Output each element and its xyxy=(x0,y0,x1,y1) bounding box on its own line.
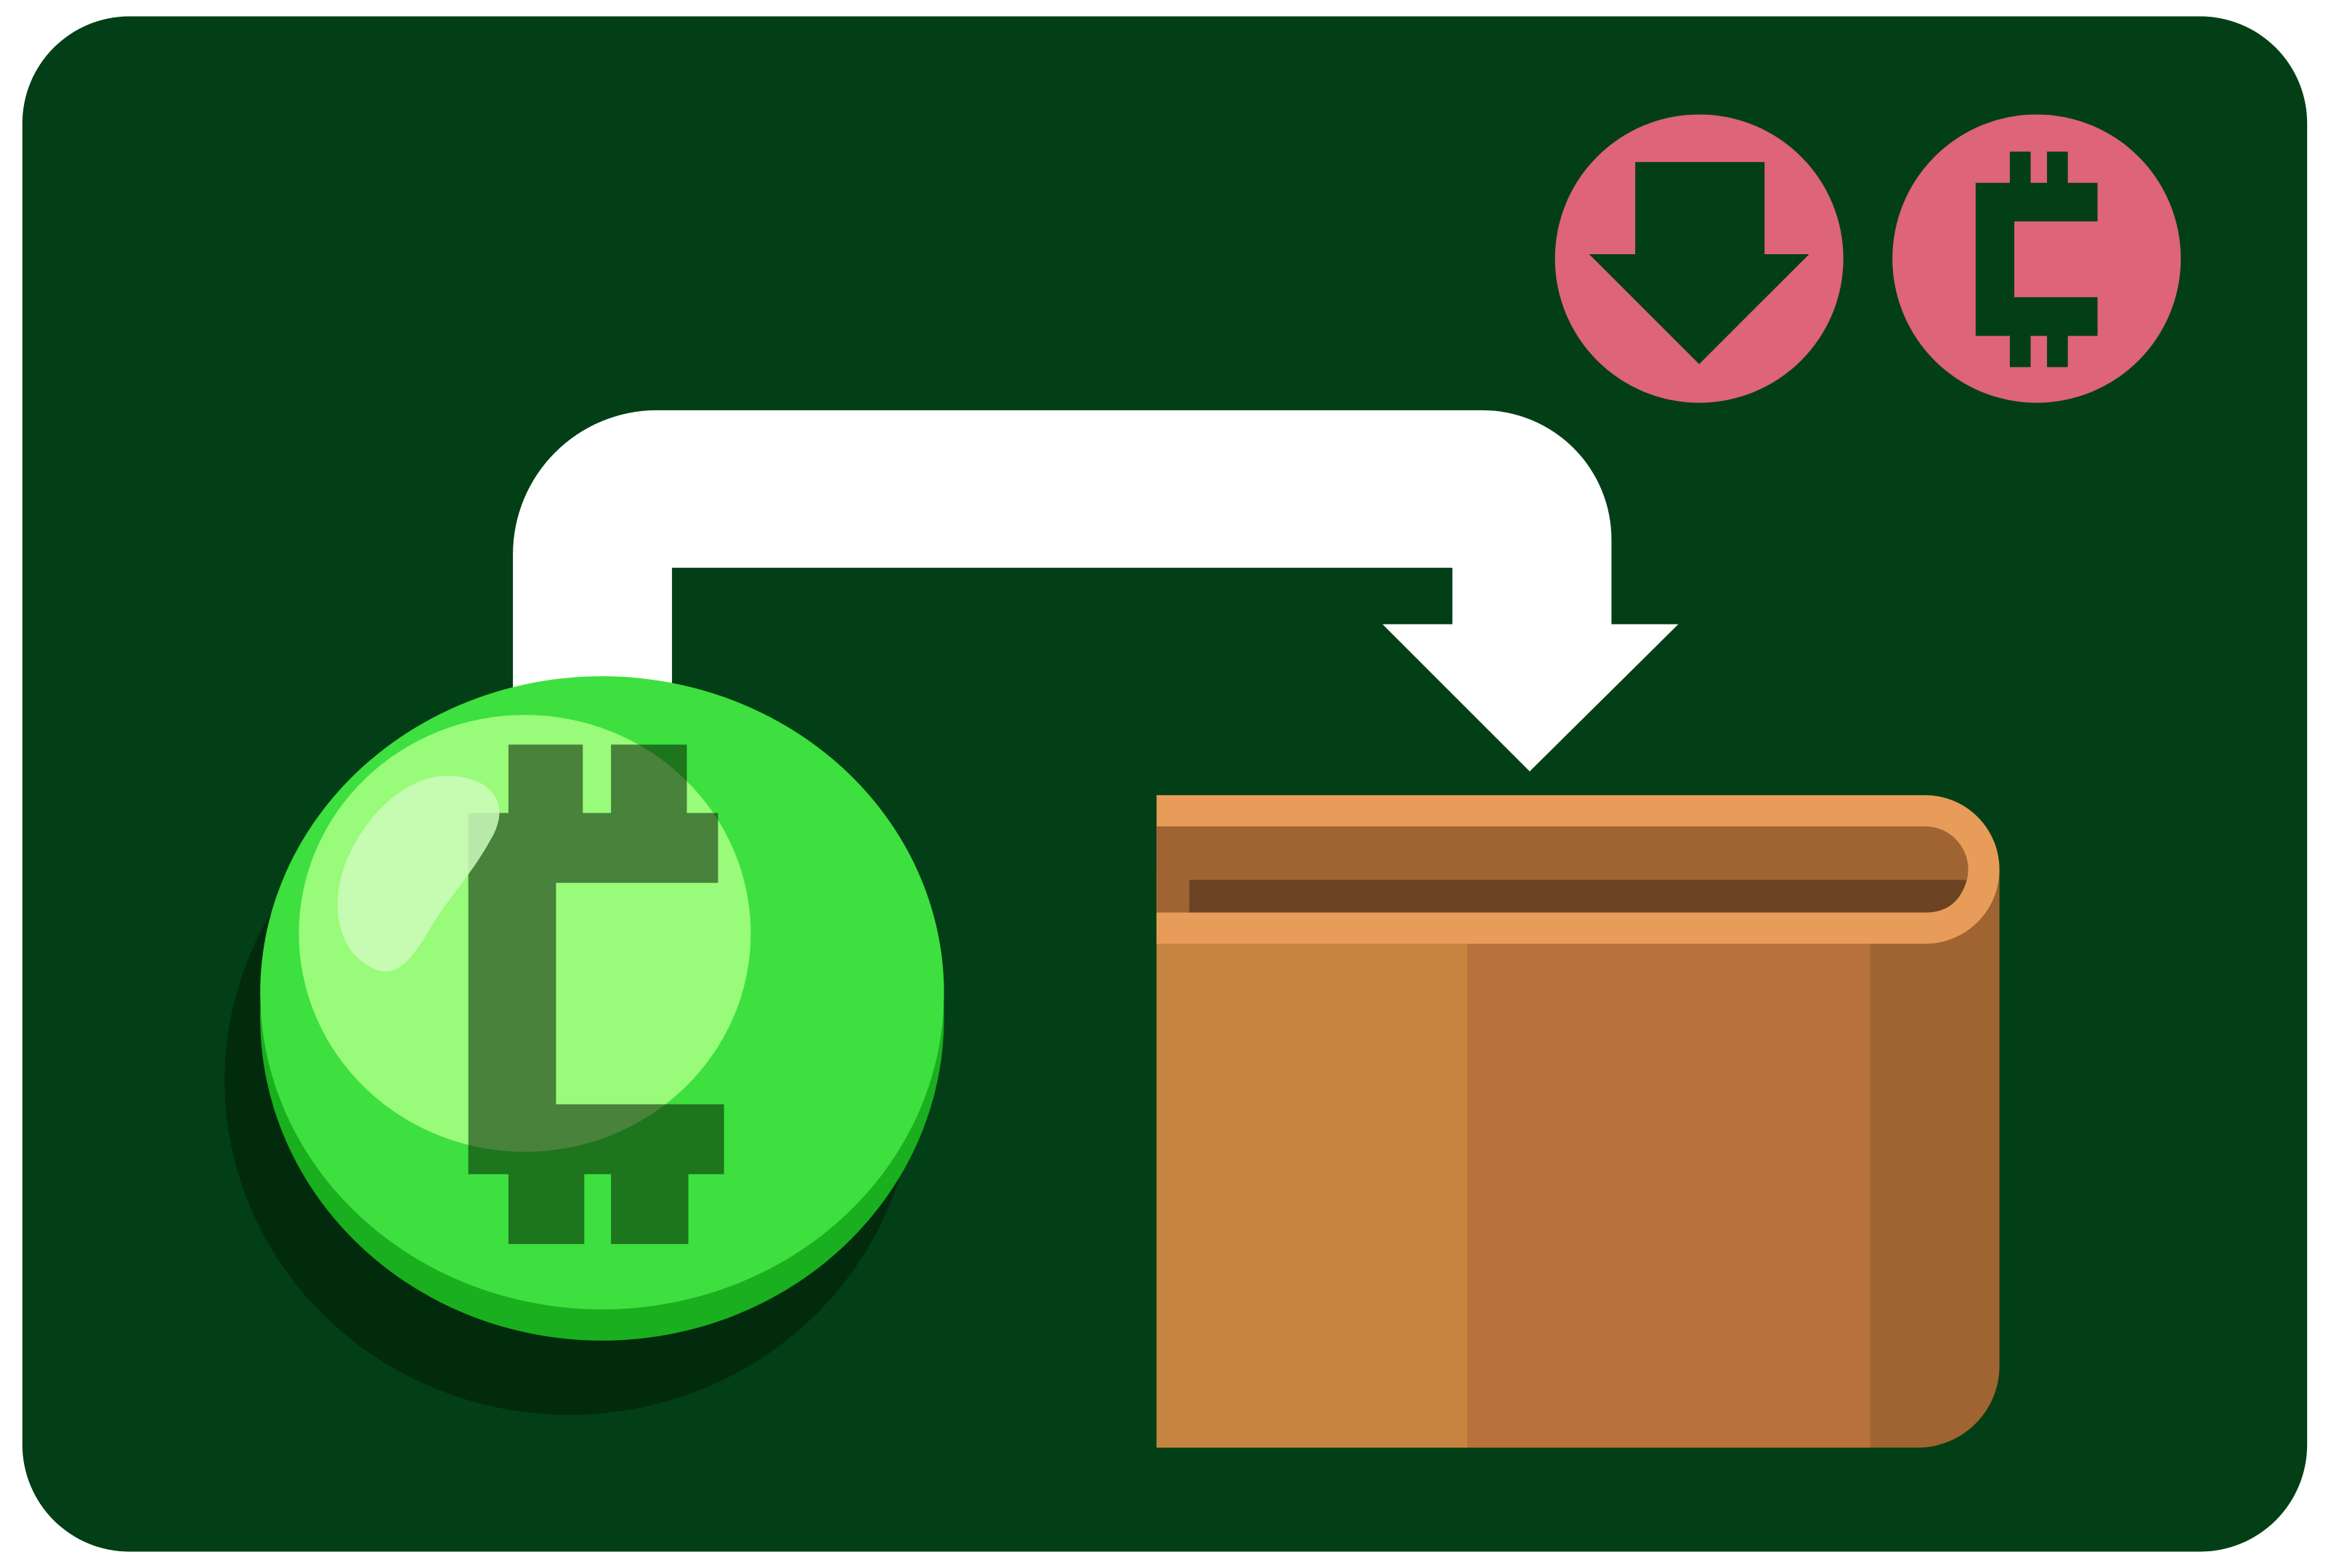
wallet xyxy=(1156,795,2000,1447)
coin symbol xyxy=(469,744,724,1244)
coin xyxy=(224,676,944,1415)
icon: download arrow circle xyxy=(1555,115,1844,403)
icon: coin symbol circle xyxy=(1892,115,2181,403)
arrow: coin to wallet xyxy=(513,410,1679,771)
coin shine xyxy=(338,776,499,972)
wallet flap xyxy=(1156,795,2000,943)
